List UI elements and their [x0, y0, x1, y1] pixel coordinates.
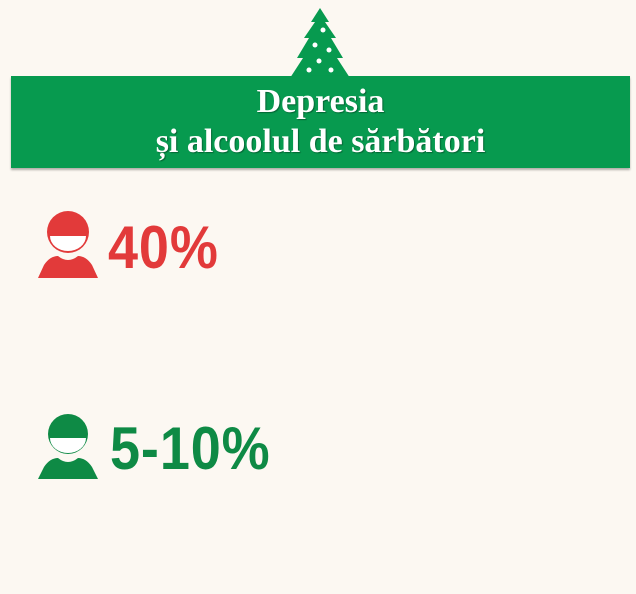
text: 40%: 40% — [108, 214, 219, 281]
icon: person red — [38, 211, 98, 278]
text: 5-10%: 5-10% — [110, 415, 271, 482]
icon: christmas tree — [291, 8, 349, 76]
stat: 40% — [38, 211, 219, 281]
stat: 5-10% — [38, 414, 271, 482]
title banner: și alcoolul de sărbători — [156, 123, 485, 160]
title banner — [11, 76, 630, 168]
icon: person green — [38, 414, 98, 479]
title banner: Depresia — [257, 83, 384, 120]
